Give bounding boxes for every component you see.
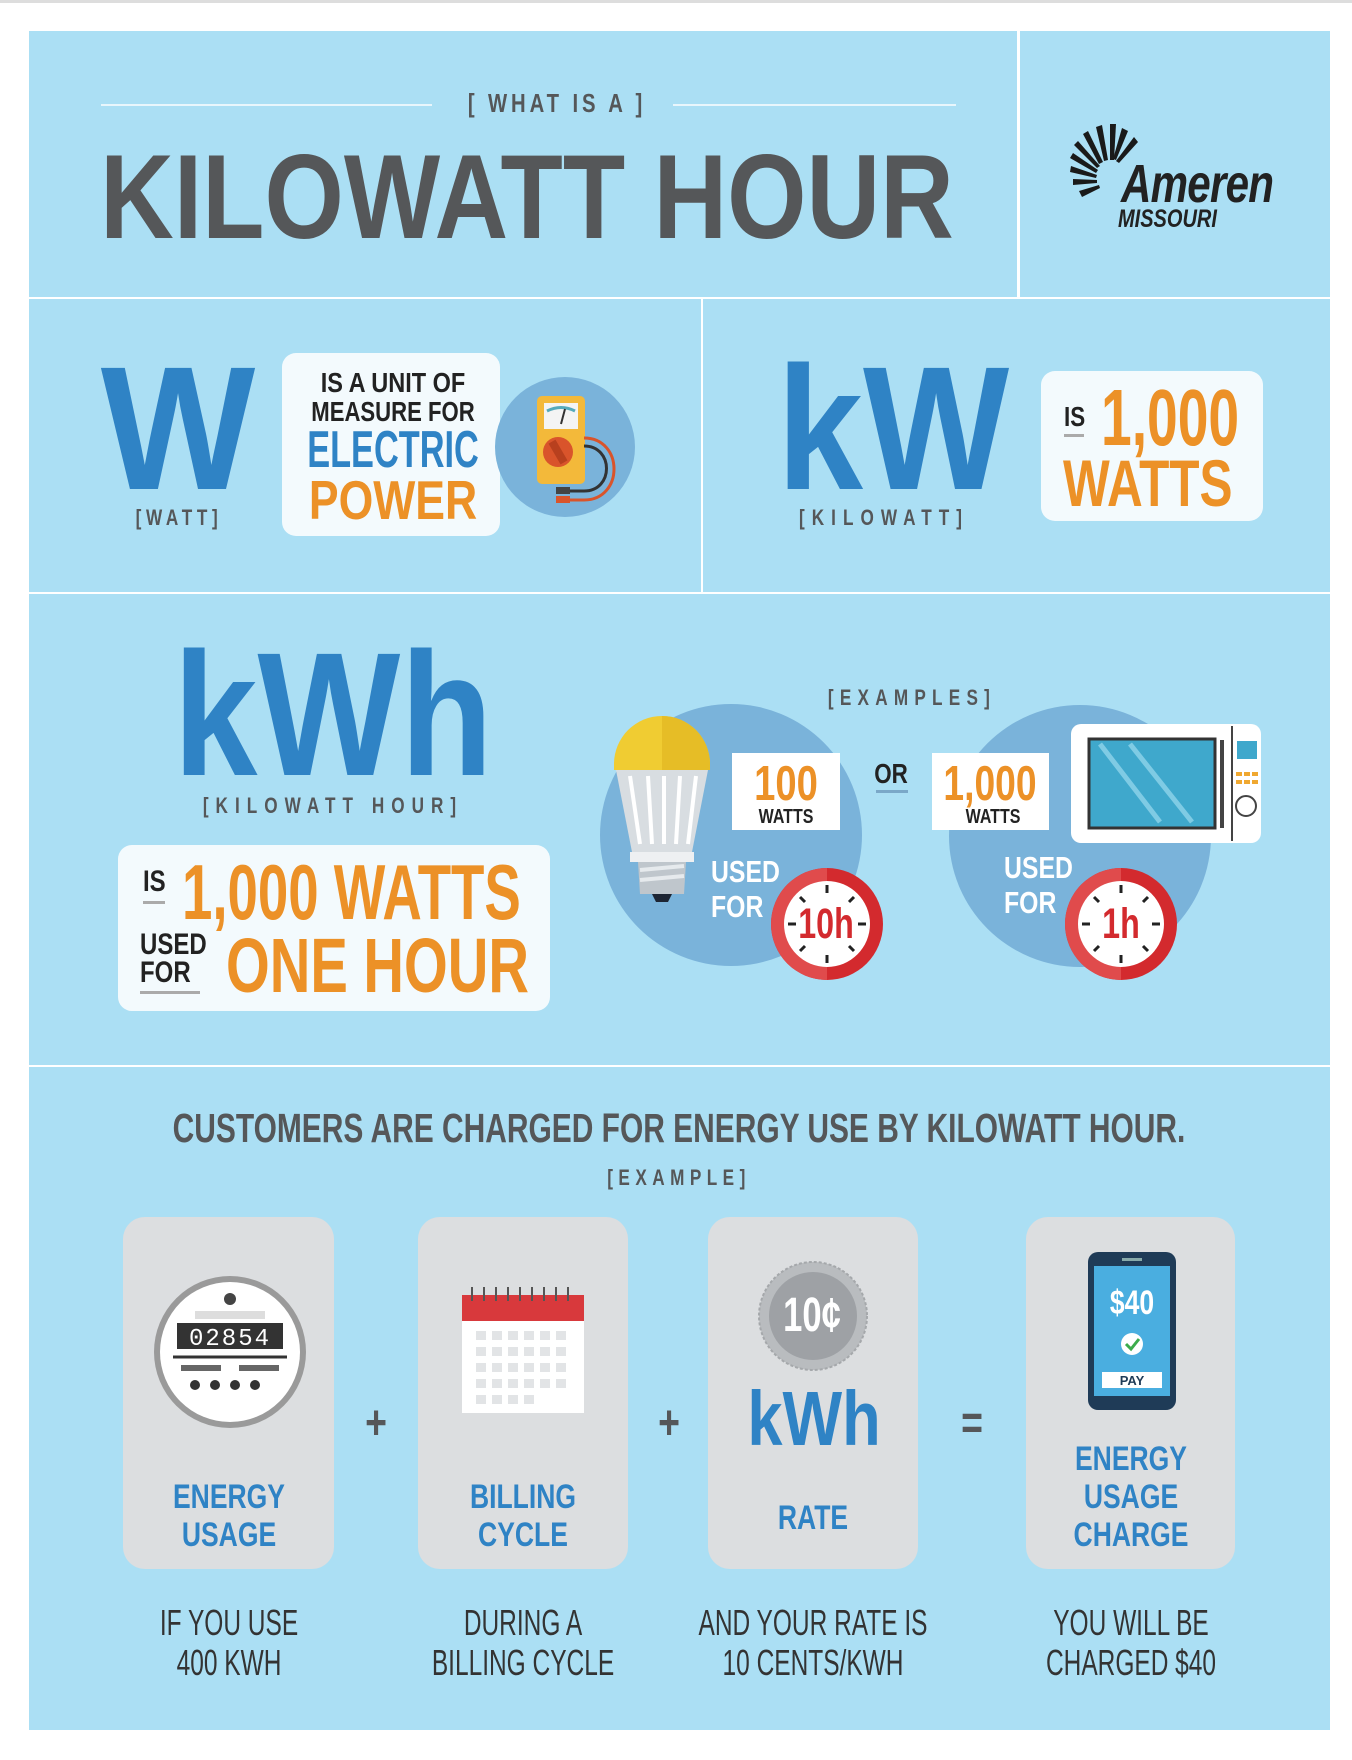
card: energy usage: ENERGY	[173, 1478, 285, 1516]
card: energy usage	[123, 1217, 334, 1569]
title: KILOWATT HOUR	[100, 130, 954, 264]
example: light bulb	[600, 704, 883, 980]
operator: plus: +	[365, 1397, 387, 1450]
logo: Ameren Missouri: MISSOURI	[1118, 205, 1217, 233]
card: energy usage: 02854	[189, 1326, 271, 1353]
value: 1,000 watts: 1,000	[943, 757, 1037, 811]
card: energy usage charge: USAGE	[1084, 1478, 1178, 1516]
card: energy usage: USAGE	[182, 1516, 276, 1554]
card: energy usage charge: PAY	[1120, 1373, 1145, 1388]
box: 1,000 watts used for one hour: USED	[140, 928, 207, 961]
value: 100 watts	[732, 753, 840, 830]
text: charged $40: YOU WILL BE	[1053, 1602, 1209, 1643]
example: light bulb: USED	[711, 854, 780, 889]
panel: logo	[1020, 31, 1330, 297]
card: rate: kWh	[747, 1376, 881, 1462]
text: rate is 10 cents: AND YOUR RATE IS	[699, 1602, 927, 1643]
text: if you use 400 kwh: IF YOU USE	[160, 1602, 298, 1643]
card: billing cycle: BILLING	[470, 1478, 576, 1516]
box: unit of measure: ELECTRIC	[307, 421, 479, 479]
card: energy usage charge: CHARGE	[1074, 1516, 1188, 1554]
panel: kilowatt	[703, 299, 1330, 592]
letter: kWh: kWh	[173, 617, 493, 813]
card: energy usage charge: ENERGY	[1075, 1440, 1187, 1478]
panel: billing example	[29, 1067, 1330, 1730]
label: kilowatt hour: [KILOWATT HOUR]	[203, 793, 463, 818]
text: charged $40	[1046, 1602, 1216, 1683]
text: rate is 10 cents: 10 CENTS/KWH	[723, 1642, 903, 1683]
box: unit of measure: POWER	[309, 469, 477, 531]
letter: W: W	[101, 331, 255, 527]
text: during a billing cycle: BILLING CYCLE	[432, 1642, 614, 1683]
value: 100 watts: 100	[754, 757, 818, 811]
heading: customers charged: CUSTOMERS ARE CHARGED FOR ENERGY USE BY KILOWATT HOUR.	[173, 1105, 1185, 1151]
label: kilowatt: [KILOWATT]	[799, 505, 969, 530]
label: example: [EXAMPLE]	[607, 1165, 751, 1190]
icon: multimeter	[495, 377, 635, 517]
box: 1,000 watts used for one hour: IS	[143, 865, 166, 898]
text: during a billing cycle: DURING A	[464, 1602, 582, 1643]
card: rate: RATE	[778, 1499, 848, 1537]
icon: clock 10h	[771, 868, 883, 980]
box: 1,000 watts used for one hour: 1,000 WATTS	[182, 848, 521, 936]
example: microwave	[932, 705, 1261, 980]
panel: kilowatt hour	[29, 594, 1330, 1065]
box: unit of measure: IS A UNIT OF	[321, 367, 465, 398]
text: rate is 10 cents	[698, 1602, 927, 1683]
box: 1,000 watts	[1041, 371, 1263, 521]
card: billing cycle	[418, 1217, 628, 1569]
box: 1,000 watts: WATTS	[1063, 446, 1233, 520]
card: rate	[708, 1217, 918, 1569]
text: charged $40: CHARGED $40	[1046, 1642, 1216, 1683]
card: energy usage charge: $40	[1110, 1284, 1154, 1322]
box: 1,000 watts used for one hour	[118, 845, 550, 1011]
example: microwave: FOR	[1004, 885, 1056, 920]
operator: equals: =	[961, 1397, 983, 1450]
example: light bulb: 10h	[798, 900, 854, 948]
label: watt: [WATT]	[136, 505, 222, 530]
example: microwave: USED	[1004, 850, 1073, 885]
subtitle: what is a: [ WHAT IS A ]	[468, 88, 646, 118]
text: if you use 400 kwh: 400 KWH	[177, 1642, 281, 1683]
value: 1,000 watts: WATTS	[966, 806, 1020, 828]
connector: or: OR	[874, 758, 908, 789]
box: 1,000 watts used for one hour: FOR	[140, 956, 191, 989]
box: 1,000 watts: 1,000	[1101, 373, 1239, 462]
example: microwave: 1h	[1102, 900, 1140, 948]
label: examples: [EXAMPLES]	[828, 685, 996, 710]
logo: Ameren Missouri	[1070, 124, 1273, 233]
value: 100 watts: WATTS	[759, 806, 813, 828]
box: unit of measure: MEASURE FOR	[311, 396, 475, 427]
operator: plus: +	[658, 1397, 680, 1450]
card: energy usage charge	[1026, 1217, 1235, 1569]
box: 1,000 watts: IS	[1064, 401, 1085, 432]
card: rate: 10¢	[783, 1289, 841, 1342]
example: light bulb: FOR	[711, 889, 763, 924]
logo: Ameren Missouri: Ameren	[1121, 154, 1273, 214]
icon: clock 1h	[1065, 868, 1177, 980]
panel: header	[29, 31, 1017, 297]
box: 1,000 watts used for one hour: ONE HOUR	[226, 923, 529, 1009]
letter: kW: kW	[777, 331, 1009, 527]
card: billing cycle: CYCLE	[478, 1516, 568, 1554]
box: unit of measure	[282, 353, 500, 536]
value: 1,000 watts	[932, 753, 1049, 830]
panel: watt	[29, 299, 701, 592]
text: if you use 400 kwh	[160, 1602, 298, 1683]
text: during a billing cycle	[432, 1602, 614, 1683]
